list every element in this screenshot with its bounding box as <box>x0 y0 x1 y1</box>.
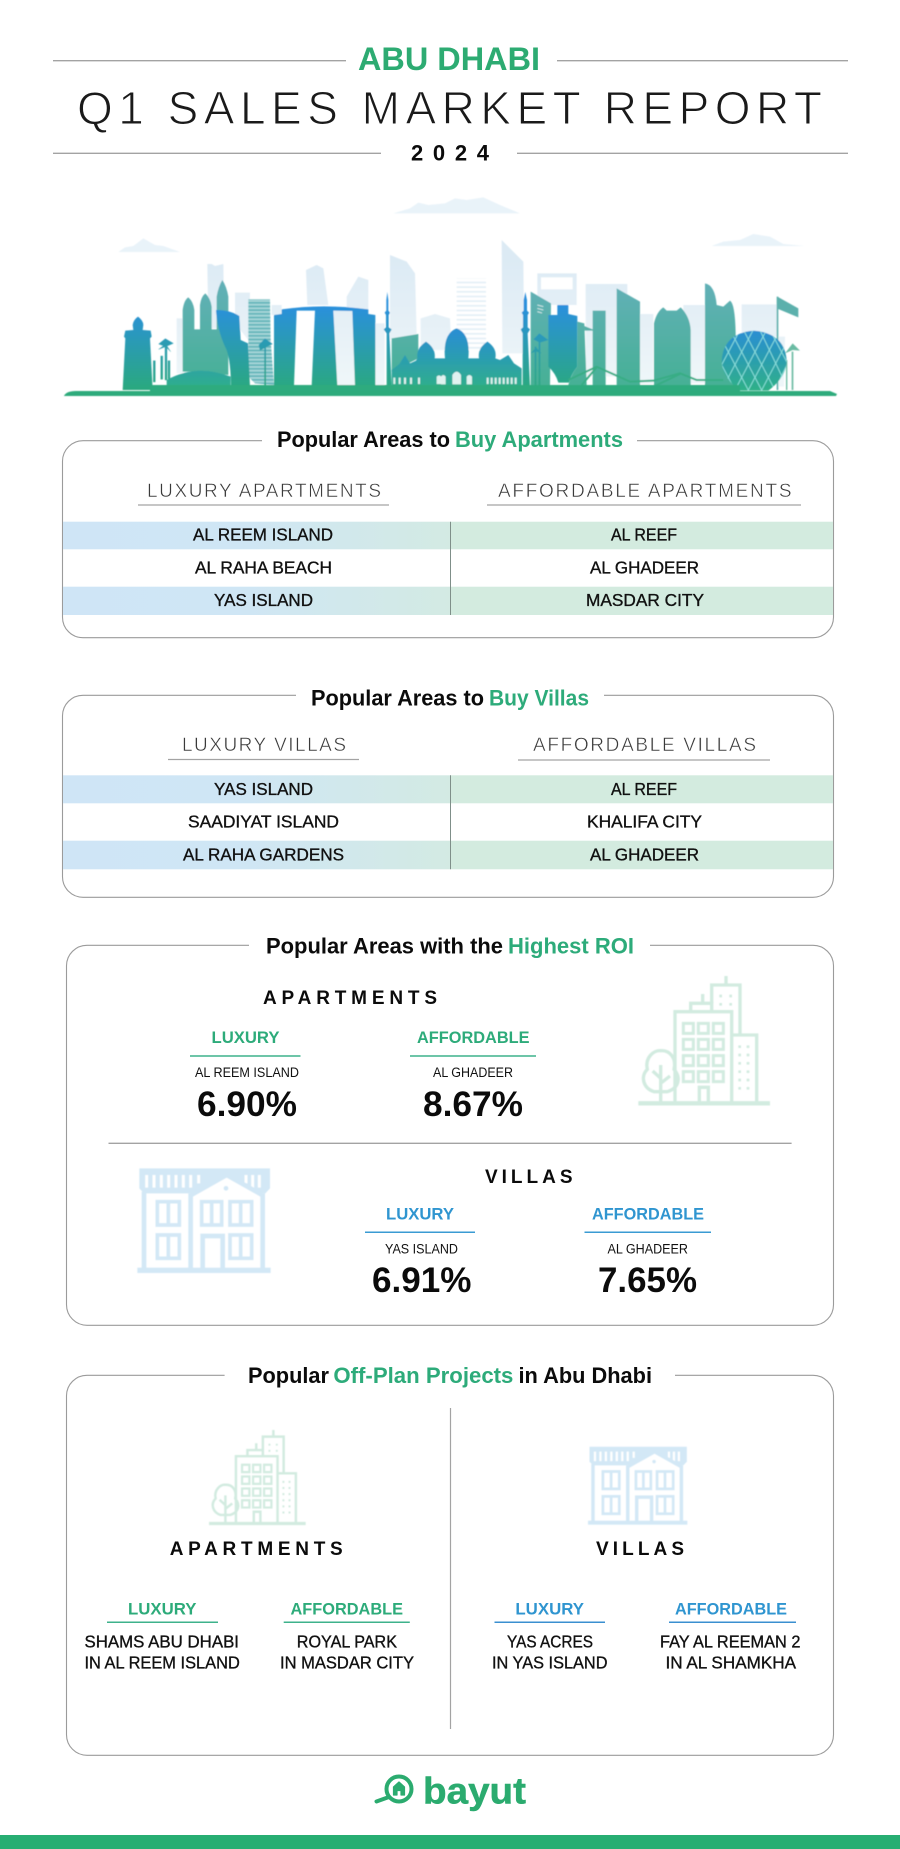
table rows: AL REEF <box>611 525 677 545</box>
flag <box>777 297 798 390</box>
column heading: luxury apartments: LUXURY APARTMENTS <box>147 481 381 502</box>
stat: affordable apartment ROI: AFFORDABLE <box>417 1028 530 1047</box>
striped tower <box>248 299 274 385</box>
project: luxury villas: IN YAS ISLAND <box>492 1652 608 1672</box>
stat: luxury villa ROI: YAS ISLAND <box>385 1241 458 1256</box>
table rows: YAS ISLAND <box>214 590 313 610</box>
table rows <box>63 522 833 615</box>
heading <box>277 427 623 452</box>
table rows: AL RAHA GARDENS <box>183 845 344 865</box>
project: affordable villas <box>660 1600 800 1672</box>
project: affordable villas: FAY AL REEMAN 2 <box>660 1632 800 1652</box>
panel: popular areas to buy villas <box>62 686 834 897</box>
stat: luxury apartment ROI: LUXURY <box>212 1028 280 1047</box>
subheading: apartments: APARTMENTS <box>170 1539 343 1560</box>
stat: affordable villa ROI: AL GHADEER <box>608 1241 688 1256</box>
stat: luxury apartment ROI <box>190 1028 300 1124</box>
stat: affordable apartment ROI <box>410 1028 536 1124</box>
illustration: Abu Dhabi skyline <box>64 197 837 396</box>
stat: luxury villa ROI: LUXURY <box>386 1205 455 1224</box>
subheading: villas: VILLAS <box>596 1539 684 1560</box>
project: luxury apartments: LUXURY <box>128 1600 197 1618</box>
palms <box>531 333 548 386</box>
icon: villa <box>588 1447 687 1525</box>
left minaret <box>384 292 392 387</box>
column heading: affordable apartments: AFFORDABLE APARTMENTS <box>498 481 792 502</box>
stat: affordable apartment ROI: AL GHADEER <box>433 1065 513 1080</box>
heading <box>266 933 634 958</box>
curved blue tower <box>216 310 250 387</box>
angled tower <box>531 292 551 386</box>
table rows: YAS ISLAND <box>214 779 313 799</box>
clouds <box>118 197 805 252</box>
table rows: AL REEF <box>611 779 677 799</box>
project: luxury villas: LUXURY <box>515 1600 585 1618</box>
logo: bayut <box>376 1770 526 1812</box>
project: affordable villas: AFFORDABLE <box>675 1600 787 1618</box>
heading: Buy Villas <box>489 686 589 711</box>
low dome <box>167 371 231 390</box>
teal block <box>392 334 418 372</box>
table rows: AL REEM ISLAND <box>193 525 333 545</box>
table rows: MASDAR CITY <box>586 590 704 610</box>
project: luxury villas <box>492 1600 608 1672</box>
title: Abu Dhabi: ABU DHABI <box>358 41 540 77</box>
project: affordable apartments: IN MASDAR CITY <box>280 1652 414 1672</box>
panel: popular off-plan projects in Abu Dhabi <box>66 1363 834 1755</box>
heading: Off-Plan Projects <box>333 1363 513 1388</box>
bridge <box>568 367 723 387</box>
palm right <box>785 343 800 390</box>
panel: popular areas with the highest ROI <box>66 933 834 1325</box>
title block <box>53 41 848 166</box>
stat: luxury apartment ROI: 6.90% <box>197 1085 297 1124</box>
title: Q1 Sales Market Report: Q1 SALES MARKET REPORT <box>77 82 822 134</box>
table rows: SAADIYAT ISLAND <box>188 812 339 832</box>
heading: Popular <box>248 1363 329 1388</box>
project: luxury apartments <box>84 1600 240 1672</box>
year: 2024 <box>411 140 490 166</box>
column heading: luxury villas: LUXURY VILLAS <box>182 735 346 756</box>
project: affordable villas: IN AL SHAMKHA <box>666 1652 796 1672</box>
lighthouse <box>123 317 153 390</box>
palm and posts <box>153 339 173 382</box>
ground <box>150 385 740 392</box>
stat: affordable villa ROI <box>584 1205 711 1300</box>
right minaret <box>521 292 530 387</box>
panel: popular areas to buy apartments <box>62 427 834 638</box>
icon: apartment building <box>209 1430 306 1523</box>
arch building <box>274 306 375 386</box>
stat: luxury apartment ROI: AL REEM ISLAND <box>195 1065 299 1080</box>
logo: bayut: bayut <box>423 1770 526 1812</box>
table rows: AL GHADEER <box>590 557 699 577</box>
stat: luxury villa ROI: 6.91% <box>372 1261 472 1300</box>
stat: affordable villa ROI: AFFORDABLE <box>592 1205 704 1224</box>
heading: Popular Areas to <box>311 686 484 711</box>
teal towers <box>568 322 587 385</box>
stat: affordable apartment ROI: 8.67% <box>423 1085 523 1124</box>
subheading: villas: VILLAS <box>485 1167 572 1188</box>
column heading: affordable villas: AFFORDABLE VILLAS <box>533 735 756 756</box>
table rows: AL RAHA BEACH <box>195 557 332 577</box>
table rows <box>63 775 833 869</box>
project: luxury apartments: IN AL REEM ISLAND <box>84 1652 240 1672</box>
project: luxury apartments: SHAMS ABU DHABI <box>84 1632 239 1652</box>
icon: apartment building <box>638 976 770 1103</box>
icon: magnifier house <box>376 1776 412 1802</box>
footer bar <box>0 1835 900 1849</box>
grand mosque <box>392 328 522 387</box>
heading: Popular Areas to <box>277 427 450 452</box>
project: affordable apartments: AFFORDABLE <box>290 1600 403 1618</box>
twin towers <box>183 280 228 375</box>
project: affordable apartments <box>280 1600 414 1672</box>
heading <box>248 1363 652 1388</box>
heading <box>311 686 589 711</box>
heading: Highest ROI <box>508 933 634 958</box>
heading: in Abu Dhabi <box>518 1363 652 1388</box>
heading: Buy Apartments <box>455 427 623 452</box>
heading: Popular Areas with the <box>266 933 503 958</box>
stat: luxury villa ROI <box>365 1205 475 1300</box>
blue tower <box>548 305 577 383</box>
project: luxury villas: YAS ACRES <box>507 1632 593 1652</box>
table rows: KHALIFA CITY <box>587 812 702 832</box>
icon: villa <box>137 1168 271 1273</box>
background towers <box>177 240 785 387</box>
table rows: AL GHADEER <box>590 845 699 865</box>
stat: affordable villa ROI: 7.65% <box>598 1261 697 1300</box>
palm on tower <box>259 338 273 386</box>
project: affordable apartments: ROYAL PARK <box>297 1632 397 1652</box>
subheading: apartments: APARTMENTS <box>263 988 437 1009</box>
